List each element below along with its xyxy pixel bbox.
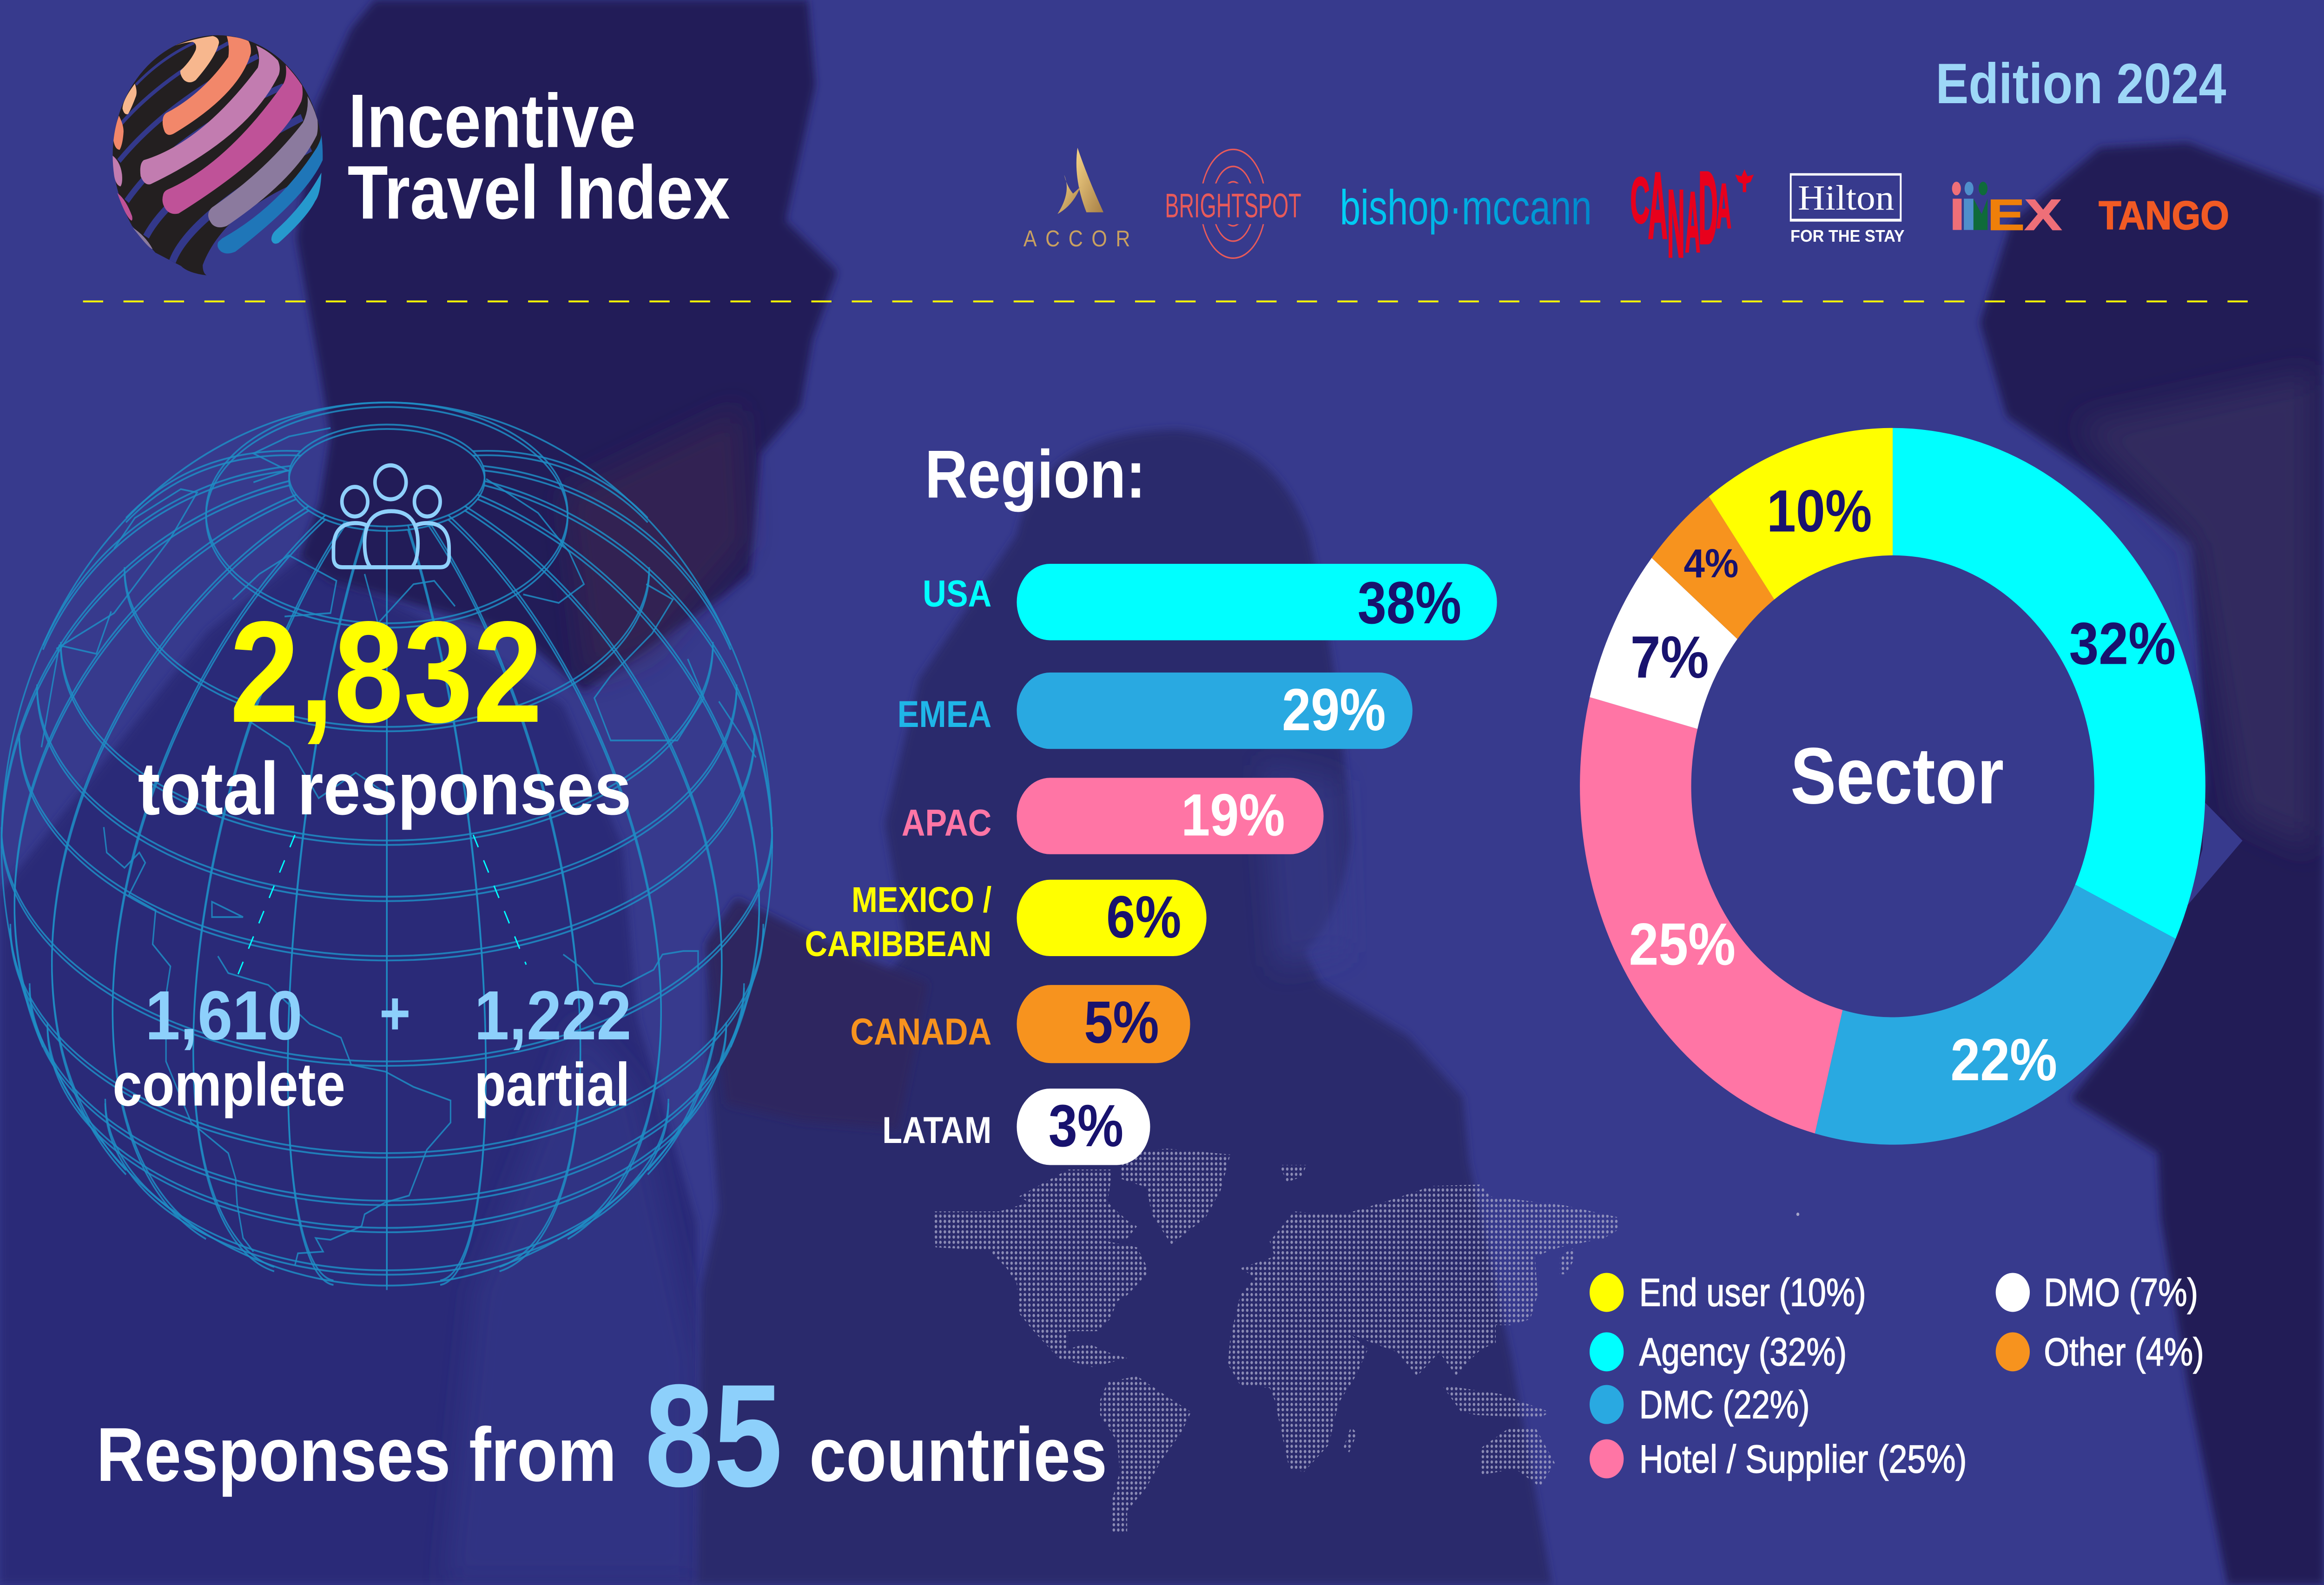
bar: Canada [850,985,1190,1063]
title: Incentive [348,79,636,164]
logo: Brightspot [1165,150,1301,258]
logo: Incentive Travel Index globe [112,35,323,275]
logo: Canada: A [1648,154,1667,258]
donut value labels: 22% [1950,1027,2057,1093]
bar: Canada: CANADA [850,1011,991,1052]
complete and partial counts: complete [112,1050,345,1119]
bar: APAC: 19% [1181,782,1285,848]
logo: Hilton [1790,173,1905,245]
legend: Other: Other (4%) [2044,1330,2204,1374]
dashed connectors [237,835,526,977]
logo: Canada [1631,151,1753,277]
logo: Hilton: FOR THE STAY [1790,227,1905,245]
donut value labels: 32% [2069,611,2176,677]
responses from 85 countries: 85 [645,1354,783,1517]
donut value labels: 10% [1767,478,1872,544]
bar: LATAM: 3% [1049,1093,1123,1159]
bar: USA [923,564,1497,640]
bar: APAC [902,778,1324,854]
logo: Canada: N [1667,170,1684,277]
legend: DMO: DMO (7%) [2044,1271,2198,1314]
logo: Canada: A [1717,172,1731,241]
logo: IMEX [1952,182,2062,239]
donut value labels: 4% [1684,541,1738,586]
donut value labels: 25% [1629,911,1736,977]
responses from 85 countries: Responses from [96,1412,617,1497]
sector legend [1590,1271,2204,1481]
logo: IMEX: E X [1987,190,2062,239]
legend: Hotel / Supplier: Hotel / Supplier (25%) [1639,1437,1967,1481]
continents on globe [41,428,756,1265]
logo: Hilton: Hilton [1798,178,1894,218]
legend: DMC: DMC (22%) [1639,1383,1809,1426]
logo: Accor: ACCOR [1023,225,1130,251]
responses from 85 countries [96,1354,1107,1517]
logo: Tango: TANGO [2099,194,2229,238]
complete and partial counts: 1,222 [474,977,631,1054]
bar: LATAM: LATAM [882,1109,991,1151]
globe line illustration [1,403,772,1290]
bar: Canada: 5% [1084,989,1159,1056]
bar: EMEA: EMEA [898,693,991,735]
bar: APAC: APAC [902,802,991,844]
bar: Mexico / Caribbean: 6% [1106,884,1181,951]
total responses stat [138,591,631,830]
complete and partial counts [112,977,631,1119]
bar: EMEA [898,673,1413,749]
bar: Mexico / Caribbean: MEXICO / [852,880,991,920]
donut value labels: 7% [1631,624,1709,691]
total responses stat: 2,832 [230,591,542,753]
sector donut chart [1580,428,2205,1145]
total responses stat: total responses [138,746,631,830]
bar: USA: USA [923,573,991,614]
title: Travel Index [348,150,730,235]
sponsor logos [1023,148,2229,277]
dotted world map [926,1138,1638,1545]
bar: USA: 38% [1358,570,1461,636]
legend: End user: End user (10%) [1639,1271,1866,1314]
complete and partial counts: partial [474,1050,630,1119]
donut center label: Sector [1790,732,2004,820]
logo: Brightspot: BRIGHTSPOT [1165,187,1301,225]
donut value labels [1629,478,2176,1093]
donut segments [1580,428,2205,1145]
bar: Mexico / Caribbean [805,880,1207,964]
bar: Mexico / Caribbean: CARIBBEAN [805,925,991,964]
title [348,79,730,235]
logo: Accor [1023,148,1130,251]
legend: Agency: Agency (32%) [1639,1330,1847,1374]
responses from 85 countries: countries [809,1412,1107,1497]
complete and partial counts: + [379,979,410,1048]
complete and partial counts: 1,610 [145,977,303,1054]
logo: Canada: C [1631,164,1650,237]
logo: Canada: A [1685,175,1700,270]
region bar chart [805,564,1497,1165]
region heading: Region: [925,436,1146,512]
bar: EMEA: 29% [1282,677,1386,743]
bar: LATAM [882,1089,1150,1165]
logo: Canada: D [1698,151,1718,264]
edition label: Edition 2024 [1936,52,2226,116]
logo: bishop mccann: bishop·mccann [1340,180,1592,235]
icon: group of people [333,465,449,567]
